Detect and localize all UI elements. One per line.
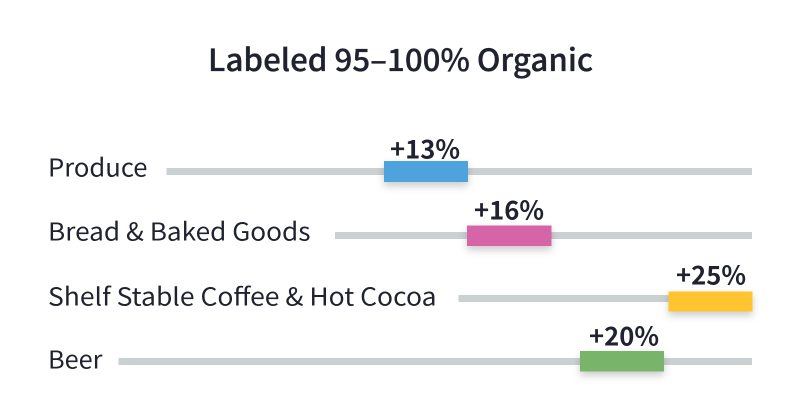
row: Beer bbox=[48, 316, 752, 376]
label: Beer: Beer bbox=[48, 342, 103, 376]
row: Shelf Stable Coffee & Hot Cocoa bbox=[48, 256, 752, 314]
track: Shelf Stable Coffee & Hot Cocoa bbox=[458, 295, 752, 302]
track: Beer bbox=[118, 358, 752, 365]
bar: Beer bbox=[580, 351, 664, 372]
bar: Produce bbox=[384, 161, 468, 182]
label: Shelf Stable Coffee & Hot Cocoa: Shelf Stable Coffee & Hot Cocoa bbox=[48, 278, 436, 314]
value: Produce: +13% bbox=[390, 130, 460, 166]
bar: Shelf Stable Coffee & Hot Cocoa bbox=[668, 292, 752, 312]
track: Bread & Baked Goods bbox=[335, 232, 752, 239]
value: Bread & Baked Goods: +16% bbox=[474, 190, 544, 228]
label: Produce: Produce bbox=[48, 150, 148, 184]
track: Produce bbox=[166, 168, 752, 175]
title: Labeled 95–100% Organic bbox=[208, 36, 593, 80]
label: Bread & Baked Goods: Bread & Baked Goods bbox=[48, 214, 310, 248]
value: Shelf Stable Coffee & Hot Cocoa: +25% bbox=[676, 256, 746, 292]
row: Produce bbox=[48, 130, 752, 184]
bar: Bread & Baked Goods bbox=[467, 226, 552, 246]
row: Bread & Baked Goods bbox=[48, 190, 752, 248]
value: Beer: +20% bbox=[589, 316, 659, 354]
